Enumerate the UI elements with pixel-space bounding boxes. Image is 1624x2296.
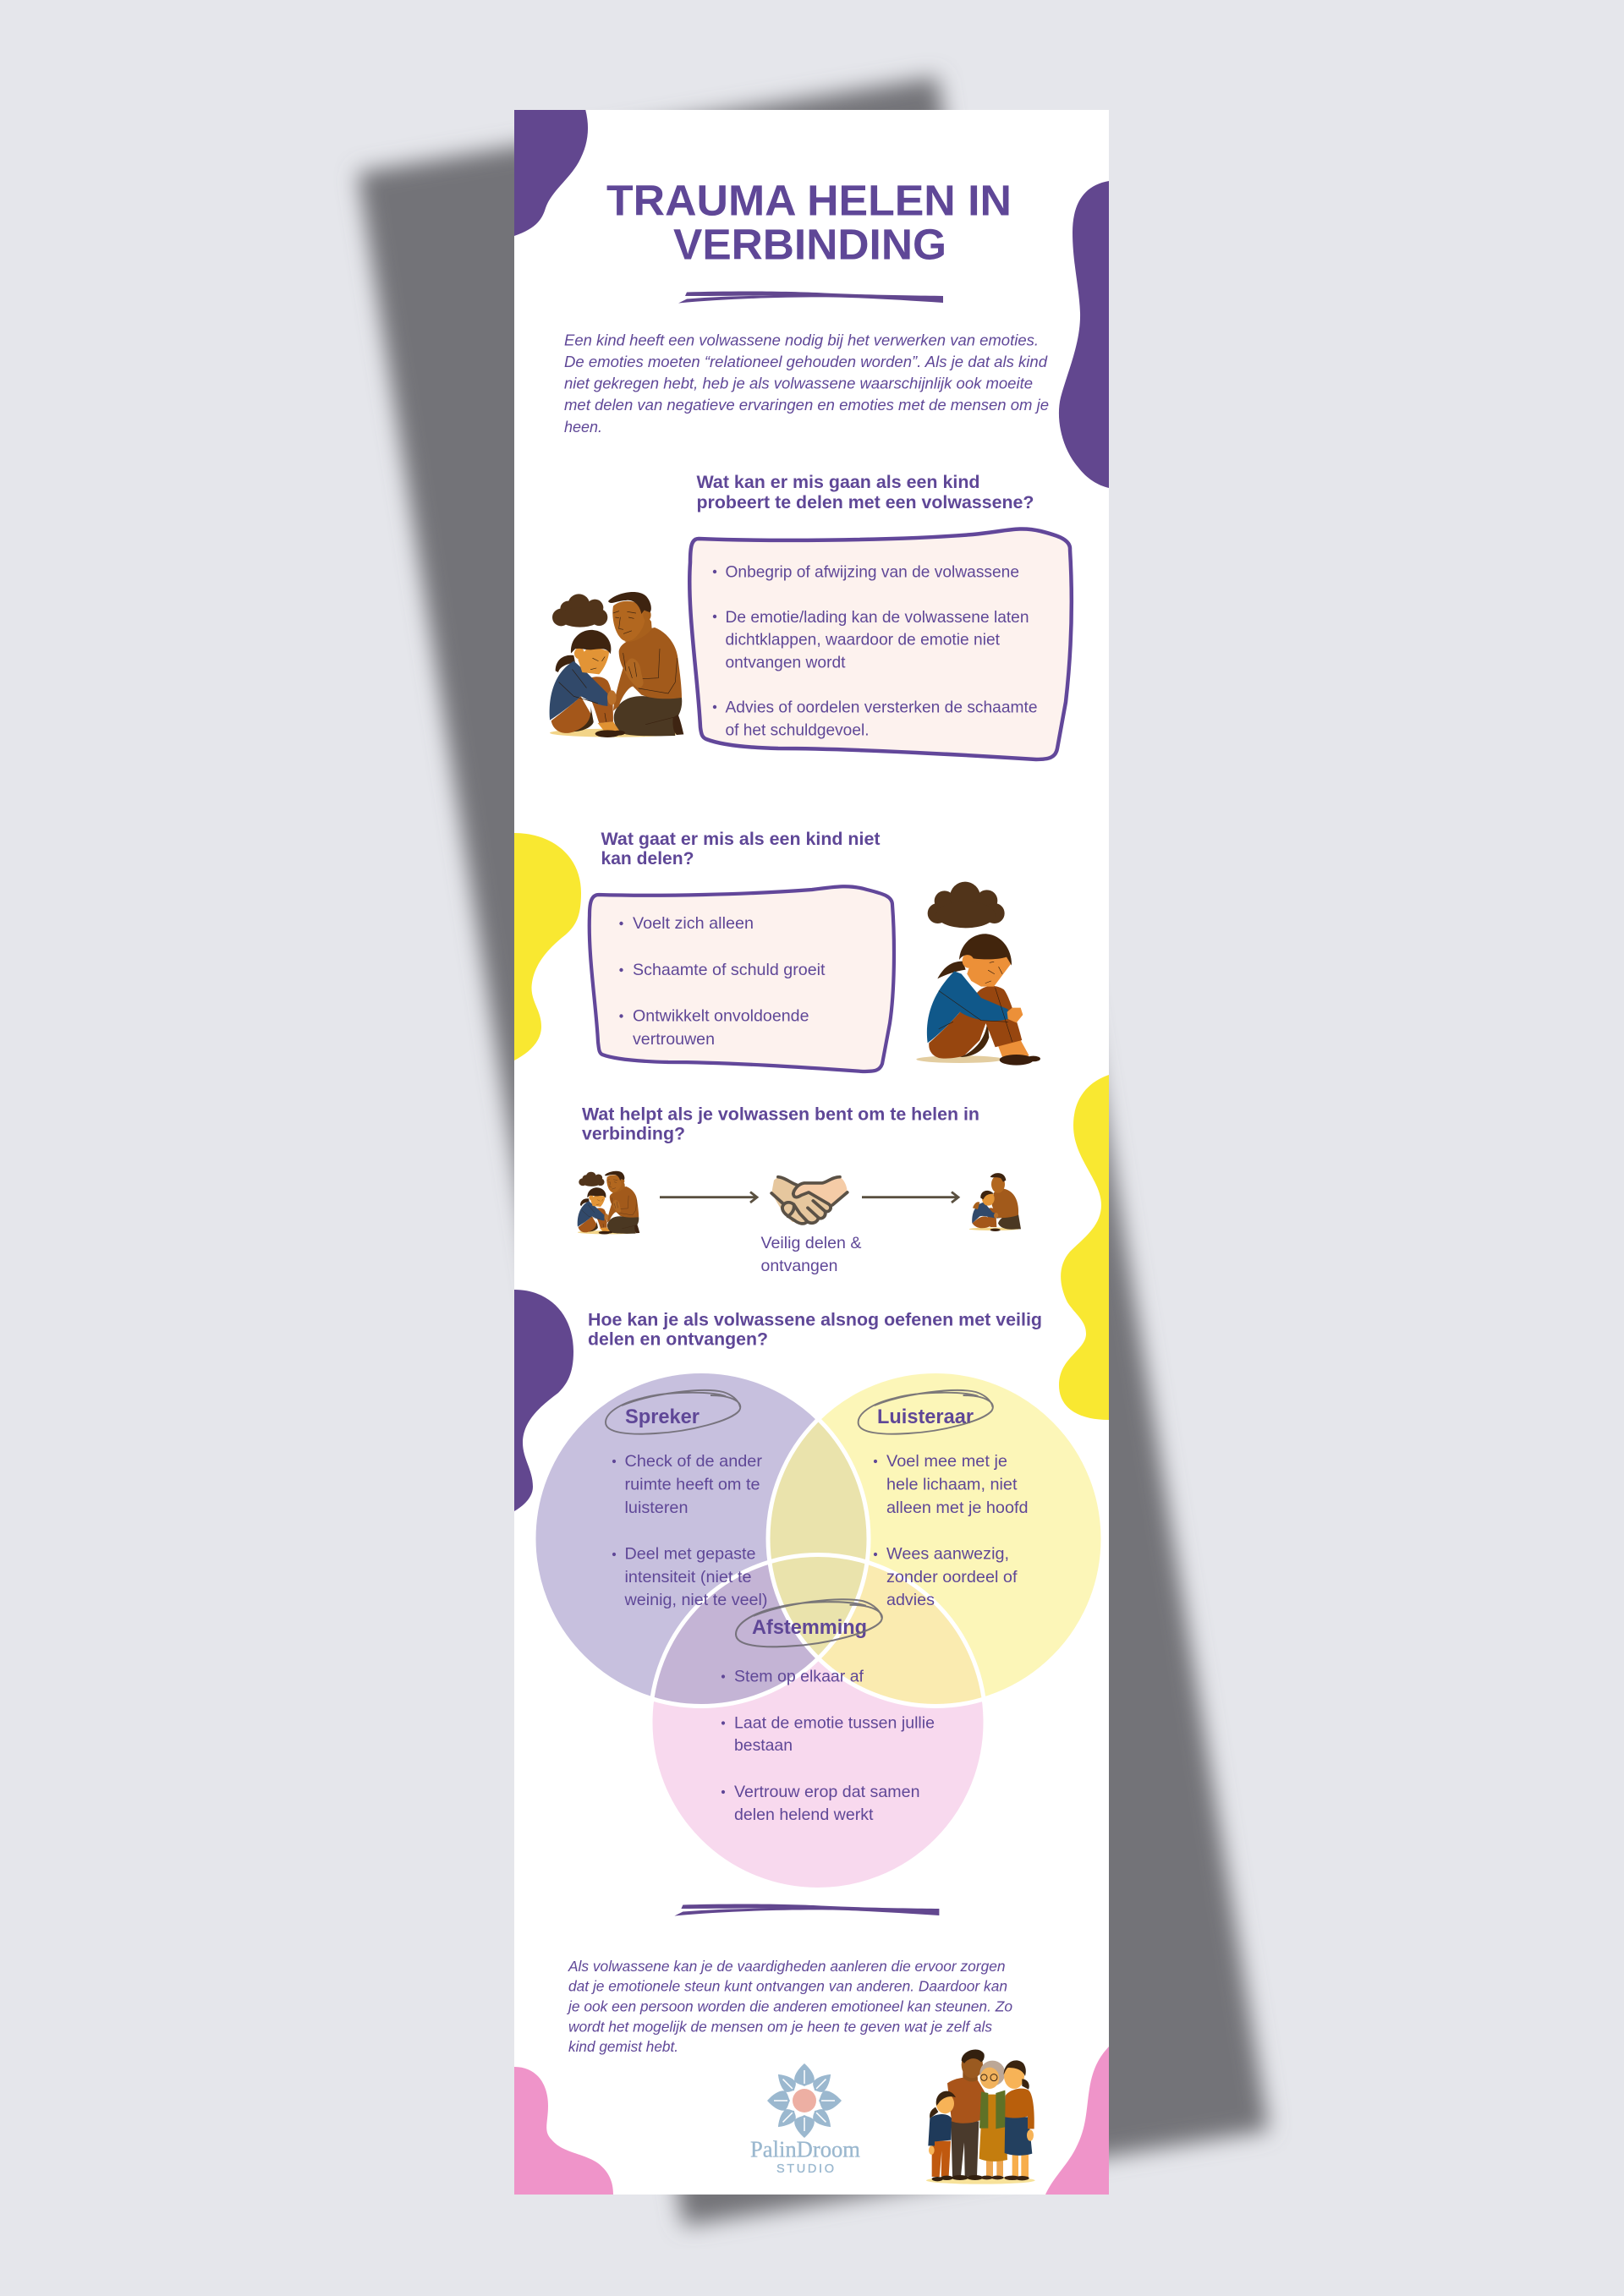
listener list: Wees aanwezig, [886,1544,1009,1563]
attunement list: Laat de emotie tussen jullie [734,1713,935,1732]
man [947,2049,985,2180]
speaker list: luisteren [624,1499,689,1517]
overlap: speaker and listener [770,1422,866,1655]
title [606,176,1012,269]
intro text: Een kind heeft een volwassene nodig bij het verwerken van emoties. [564,332,1039,348]
speaker list: weinig, niet te veel) [623,1591,768,1609]
heading: what goes wrong when a child cannot share: Wat gaat er mis als een kind niet [601,830,881,849]
circle: listener [768,1372,1103,1707]
closing text: je ook een persoon worden die anderen emotioneel kan steunen. Zo [567,1997,1012,2014]
circle: attunement [650,1554,985,1889]
panel: sharing goes wrong list [689,529,1072,759]
heading: what goes wrong when a child cannot share: kan delen? [601,849,694,869]
list text: ontvangen wordt [726,653,846,671]
wordmark: PalinDroom [750,2136,860,2162]
decorative blobs [514,109,1109,2195]
speaker heading: Spreker [625,1406,700,1428]
storm cloud [552,594,607,627]
list text: Advies of oordelen versterken de schaamte [726,699,1037,717]
listener list: zonder oordeel of [886,1568,1018,1586]
logo: PalinDroom Studio [750,2063,860,2176]
attunement list [721,1668,935,1824]
intro text: niet gekregen hebt, heb je als volwassene waarschijnlijk ook moeite [564,374,1033,392]
arrow [660,1192,757,1203]
list text: of het schuldgevoel. [726,721,870,739]
listener list [874,1452,1029,1609]
overlap: listener and attunement [821,1564,981,1704]
bullets [619,922,623,1018]
heading: what goes wrong when a child cannot share [601,830,881,869]
blob: left purple [514,1290,573,1511]
listener heading: Luisteraar [877,1406,974,1428]
intro text [564,332,1049,436]
intro text: met delen van negatieve ervaringen en emoties met de mensen om je [564,396,1049,414]
illustration: adult beside sad child [550,592,683,737]
listener heading [859,1390,993,1434]
list text: De emotie/lading kan de volwassene laten [726,608,1029,627]
list text: Schaamte of schuld groeit [633,961,826,979]
title: VERBINDING [673,220,946,269]
heading: what helps as an adult [582,1104,979,1143]
speaker list: intensiteit (niet te [624,1568,751,1586]
blob: left yellow [514,833,581,1060]
closing text: dat je emotionele steun kunt ontvangen van anderen. Daardoor kan [568,1977,1007,1994]
arrow [862,1192,958,1203]
sub-wordmark: STUDIO [776,2162,834,2176]
flow: healing in connection [578,1171,1021,1275]
attunement heading [736,1599,882,1647]
drop shadow of the card [358,77,1269,2226]
icon: handshake [771,1177,848,1224]
speaker list: Check of de ander [624,1452,763,1471]
heading: what can go wrong when sharing [697,473,1034,512]
listener list: advies [886,1591,935,1609]
intro text: heen. [564,418,602,436]
woman [1004,2060,1034,2180]
illustration: child alone under cloud [916,882,1040,1066]
venn diagram [534,1372,1103,1889]
hand-drawn box [689,529,1072,759]
caption: ontvangen [761,1257,837,1275]
brush stroke divider [678,291,943,303]
blob: bottom-right pink [1045,2047,1109,2195]
small illustration: before [578,1171,639,1235]
heading: what helps as an adult: Wat helpt als je volwassen bent om te helen in [582,1104,979,1125]
heading: how to practise [588,1311,1042,1350]
panel: poster card [514,110,1109,2195]
blob: right yellow [1059,1075,1109,1420]
blob: top-right purple [1059,181,1109,488]
list text: vertrouwen [633,1030,715,1049]
caption [761,1234,861,1275]
closing text: Als volwassene kan je de vaardigheden aanleren die ervoor zorgen [568,1958,1005,1975]
blob: bottom-left pink [514,2067,613,2195]
title: TRAUMA HELEN IN [606,176,1012,225]
child [550,630,625,737]
speaker list: Deel met gepaste [624,1544,756,1563]
blob: top-left purple [514,109,588,236]
adult [608,592,683,736]
listener list: alleen met je hoofd [886,1499,1029,1517]
list text: Ontwikkelt onvoldoende [633,1006,809,1025]
heading: what can go wrong when sharing: probeert te delen met een volwassene? [697,493,1034,512]
list text [726,563,1037,739]
overlap: speaker and attunement [655,1564,815,1704]
icon: flower [767,2063,842,2138]
bullets [713,570,716,709]
attunement list: bestaan [734,1736,793,1755]
speaker list: ruimte heeft om te [624,1475,760,1493]
child [928,2091,956,2181]
circle: speaker [534,1372,869,1707]
hand-drawn box [590,886,894,1071]
attunement list: delen helend werkt [734,1806,874,1824]
heading: how to practise: Hoe kan je als volwassene alsnog oefenen met veilig [588,1311,1042,1329]
grandmother [979,2061,1007,2179]
list text [633,914,826,1049]
brush stroke divider [674,1904,939,1916]
closing text [567,1958,1012,2055]
closing text: wordt het mogelijk de mensen om je heen te geven wat je zelf als [568,2018,992,2035]
attunement list: Stem op elkaar af [734,1668,864,1686]
speaker heading [606,1390,740,1434]
heading: what helps as an adult: verbinding? [582,1125,685,1143]
listener list: hele lichaam, niet [886,1475,1018,1493]
heading: how to practise: delen en ontvangen? [588,1329,768,1350]
circle outlines [534,1372,1103,1889]
caption: Veilig delen & [761,1234,861,1252]
closing text: kind gemist hebt. [568,2038,678,2055]
illustration: happy family [926,2049,1035,2184]
heading: what can go wrong when sharing: Wat kan er mis gaan als een kind [697,473,979,492]
storm cloud [928,882,1005,928]
list text: Voelt zich alleen [633,914,754,933]
attunement heading: Afstemming [752,1616,867,1639]
panel: cannot share list [590,886,894,1071]
list text: dichtklappen, waardoor de emotie niet [726,631,1001,649]
attunement list: Vertrouw erop dat samen [734,1783,920,1801]
small illustration: after, embrace [969,1173,1021,1231]
list text: Onbegrip of afwijzing van de volwassene [726,563,1019,582]
child figure [927,934,1040,1066]
speaker list [612,1452,768,1609]
intro text: De emoties moeten “relationeel gehouden worden”. Als je dat als kind [564,353,1048,370]
listener list: Voel mee met je [886,1452,1007,1471]
